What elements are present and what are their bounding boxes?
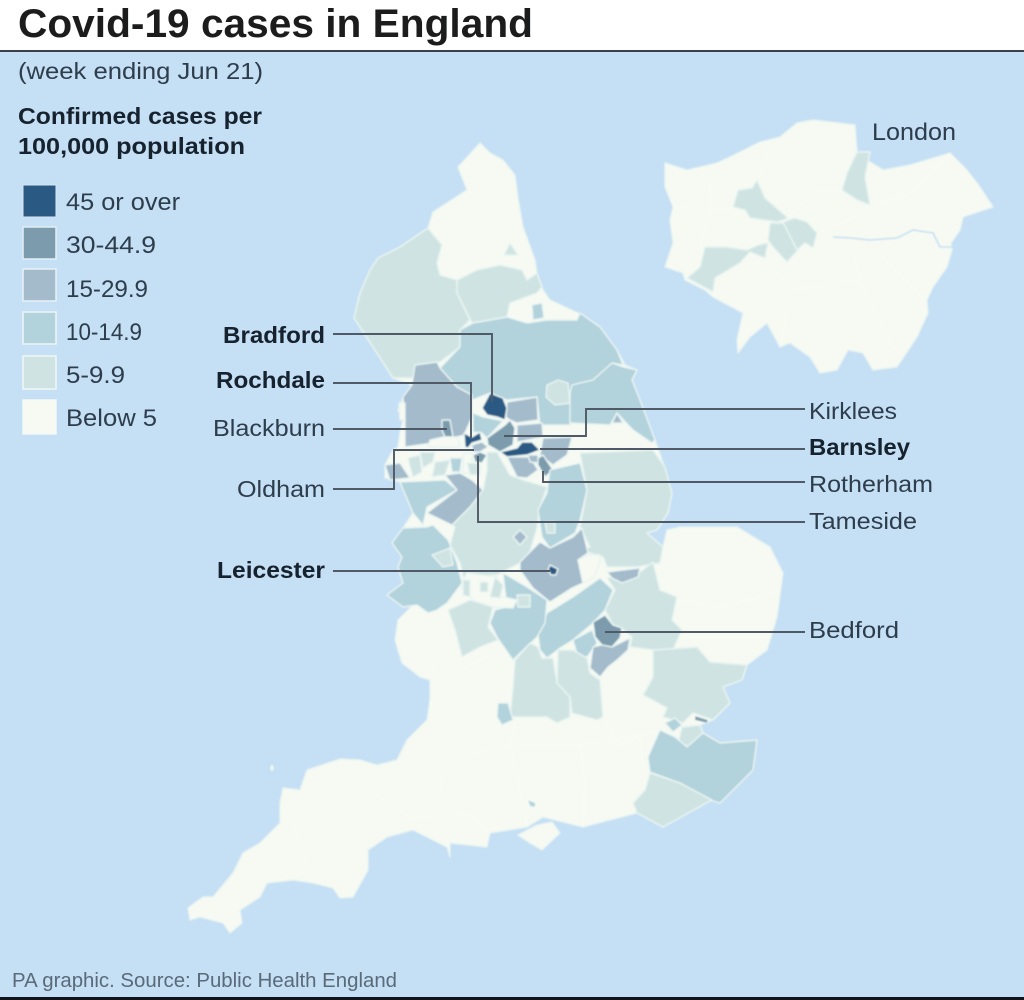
region: Greater Manchester districts	[408, 452, 480, 477]
region: Derbyshire and Staffordshire	[450, 452, 547, 577]
region: Peterborough	[607, 568, 640, 583]
Isle of Wight	[518, 822, 560, 850]
leader lines	[333, 334, 805, 632]
region: East Riding	[570, 363, 655, 443]
Hounslow	[687, 243, 768, 292]
right place labels: Tameside	[809, 508, 917, 534]
region: small South Yorkshire district	[528, 455, 538, 463]
legend: 45 or over	[66, 189, 180, 216]
region: Barnsley	[500, 442, 540, 457]
region: Northamptonshire	[538, 578, 613, 658]
map: England	[188, 143, 783, 933]
legend: 30-44.9	[66, 232, 156, 259]
region: Warwickshire	[490, 573, 547, 660]
legend heading: 100,000 population	[18, 133, 245, 159]
Lundy	[270, 765, 274, 771]
region: Kirklees	[487, 420, 515, 452]
region: North Yorkshire	[440, 313, 623, 425]
region: Swindon	[497, 703, 513, 725]
Thames	[833, 230, 952, 247]
region: Worcestershire	[448, 600, 498, 657]
source line: PA graphic. Source: Public Health England	[12, 970, 397, 992]
region: Hull	[612, 413, 623, 423]
left place labels: Rochdale	[216, 367, 325, 393]
region: Rochdale	[464, 432, 482, 448]
region: Central Bedfordshire	[590, 638, 630, 677]
region: Wirral	[385, 463, 410, 480]
legend heading	[18, 103, 262, 159]
region: Tameside	[473, 452, 487, 463]
region: Nottinghamshire	[538, 463, 587, 548]
region: Blackburn	[442, 420, 453, 437]
legend: Below 5	[66, 405, 157, 432]
region: Telford	[432, 548, 453, 567]
left place labels: Bradford	[223, 322, 325, 348]
legend: 5-9.9	[66, 362, 125, 389]
region: Cambridgeshire	[605, 562, 682, 650]
region: Leeds	[506, 397, 538, 423]
region: Cumbria	[354, 228, 470, 378]
inner west boroughs	[768, 218, 817, 262]
left place labels: Leicester	[217, 557, 325, 583]
region: Cheshire East	[427, 473, 483, 525]
left place labels: Oldham	[237, 476, 325, 502]
region: Tees patch	[532, 303, 544, 320]
right place labels: Bedford	[809, 617, 899, 643]
region: Thurrock	[665, 718, 682, 732]
map: London	[665, 120, 993, 373]
region: Kent	[648, 730, 757, 803]
region: Rutland	[578, 555, 600, 583]
region: Cheshire West	[400, 480, 457, 525]
region: Sheffield	[507, 457, 538, 478]
region: Leicester	[548, 565, 558, 575]
London outline	[665, 120, 993, 373]
region: Doncaster	[540, 437, 572, 465]
legend	[23, 185, 180, 434]
region: Derby	[513, 530, 527, 545]
region: Tyneside patch	[504, 243, 518, 255]
region: Buckinghamshire	[557, 650, 603, 720]
region: Lancashire	[403, 362, 472, 447]
bottom rule	[0, 997, 1024, 1000]
region: Essex	[643, 647, 747, 723]
region: Shropshire	[387, 525, 462, 613]
region: County Durham	[457, 265, 542, 323]
region: Bradford	[482, 393, 507, 420]
region: Leicestershire	[520, 528, 588, 602]
region: East Sussex	[633, 773, 712, 827]
left place labels: Blackburn	[213, 415, 325, 441]
region: Milton Keynes	[573, 630, 597, 657]
right place labels: Rotherham	[809, 471, 933, 497]
region: Bedford	[593, 615, 622, 647]
title band	[0, 0, 1024, 52]
subtitle: (week ending Jun 21)	[18, 58, 263, 84]
region: Southampton	[528, 800, 535, 807]
Brent	[733, 180, 788, 222]
legend heading: Confirmed cases per	[18, 103, 262, 129]
region: Lincolnshire	[580, 450, 672, 567]
region: Blackpool	[399, 403, 405, 420]
region: Oxfordshire	[510, 643, 570, 723]
region: West Midlands	[460, 573, 530, 608]
title: Covid-19 cases in England	[18, 2, 533, 46]
left place labels	[213, 322, 325, 583]
region: Wakefield	[517, 423, 543, 442]
region: Greater Manchester white patch	[428, 437, 460, 447]
region: Nottingham	[545, 522, 555, 533]
internal boundaries of low-case areas	[293, 593, 773, 867]
right place labels	[809, 398, 933, 643]
region: York	[546, 380, 570, 405]
right place labels: Barnsley	[809, 434, 910, 460]
London label: London	[872, 119, 956, 146]
right place labels: Kirklees	[809, 398, 897, 424]
region: Rotherham	[535, 455, 553, 477]
legend: 15-29.9	[66, 276, 148, 303]
region: Medway	[678, 725, 703, 747]
region: Oldham	[472, 442, 488, 452]
Waltham Forest	[842, 152, 870, 205]
legend: 10-14.9	[66, 319, 142, 346]
region: Calderdale	[473, 413, 503, 438]
London borough boundaries	[673, 150, 950, 350]
region: Southend	[695, 716, 708, 723]
land outline	[188, 143, 783, 933]
